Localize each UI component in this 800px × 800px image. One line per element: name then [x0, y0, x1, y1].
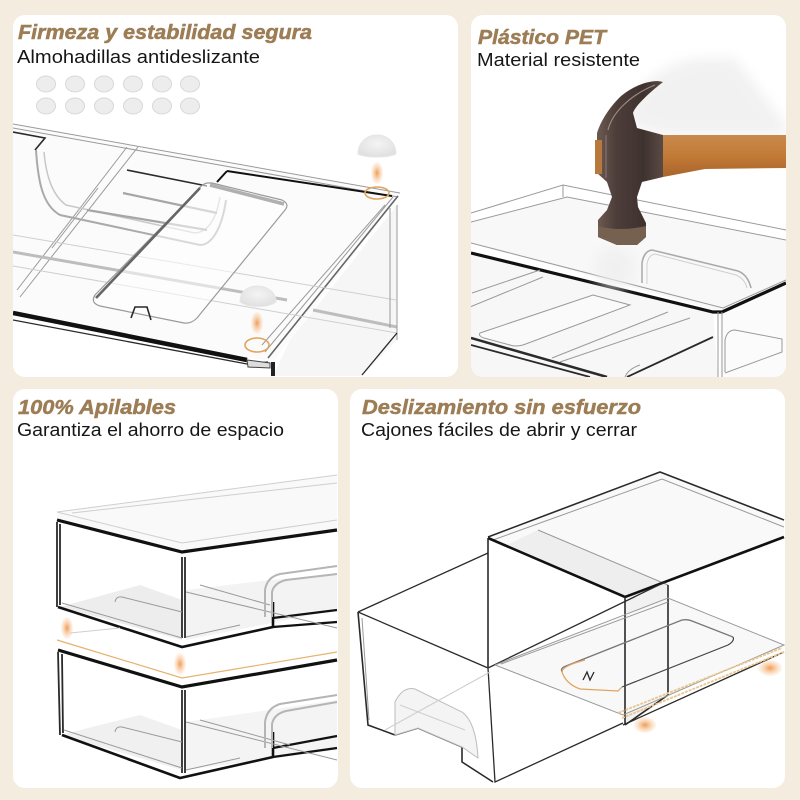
drawer illustration: underside	[13, 124, 400, 376]
heading: firmeza: Firmeza y estabilidad segura	[18, 22, 312, 44]
drawer illustration and hammer	[470, 58, 786, 377]
motion blur	[633, 60, 782, 134]
glow markers	[634, 660, 782, 733]
stacked drawers illustration	[57, 475, 337, 778]
slide rail	[618, 648, 784, 718]
heading: deslizamiento: Deslizamiento sin esfuerzo	[362, 397, 641, 419]
text: garantiza: Garantiza el ahorro de espacio	[17, 420, 284, 440]
handle	[395, 689, 478, 758]
upper drawer	[57, 475, 337, 647]
hammer head	[597, 81, 663, 245]
drawer window outline	[93, 183, 287, 323]
hammer handle	[663, 135, 786, 177]
panel: plastico PET	[470, 15, 786, 377]
panel: firmeza y estabilidad	[13, 15, 458, 377]
open drawer illustration	[358, 472, 784, 782]
icon: domed pads	[240, 135, 396, 306]
arrows	[61, 617, 186, 675]
heading: plastico: Plástico PET	[478, 27, 608, 49]
lower drawer	[57, 628, 337, 778]
panel: deslizamiento	[350, 389, 785, 788]
icon: anti-slip pads	[36, 76, 200, 114]
text: cajones: Cajones fáciles de abrir y cerrar	[361, 420, 637, 440]
panel: apilables	[13, 389, 338, 788]
text: material: Material resistente	[477, 50, 640, 70]
text: almohadillas: Almohadillas antideslizante	[17, 47, 260, 67]
arrows and pad rings	[245, 162, 389, 352]
heading: apilables: 100% Apilables	[18, 397, 176, 419]
